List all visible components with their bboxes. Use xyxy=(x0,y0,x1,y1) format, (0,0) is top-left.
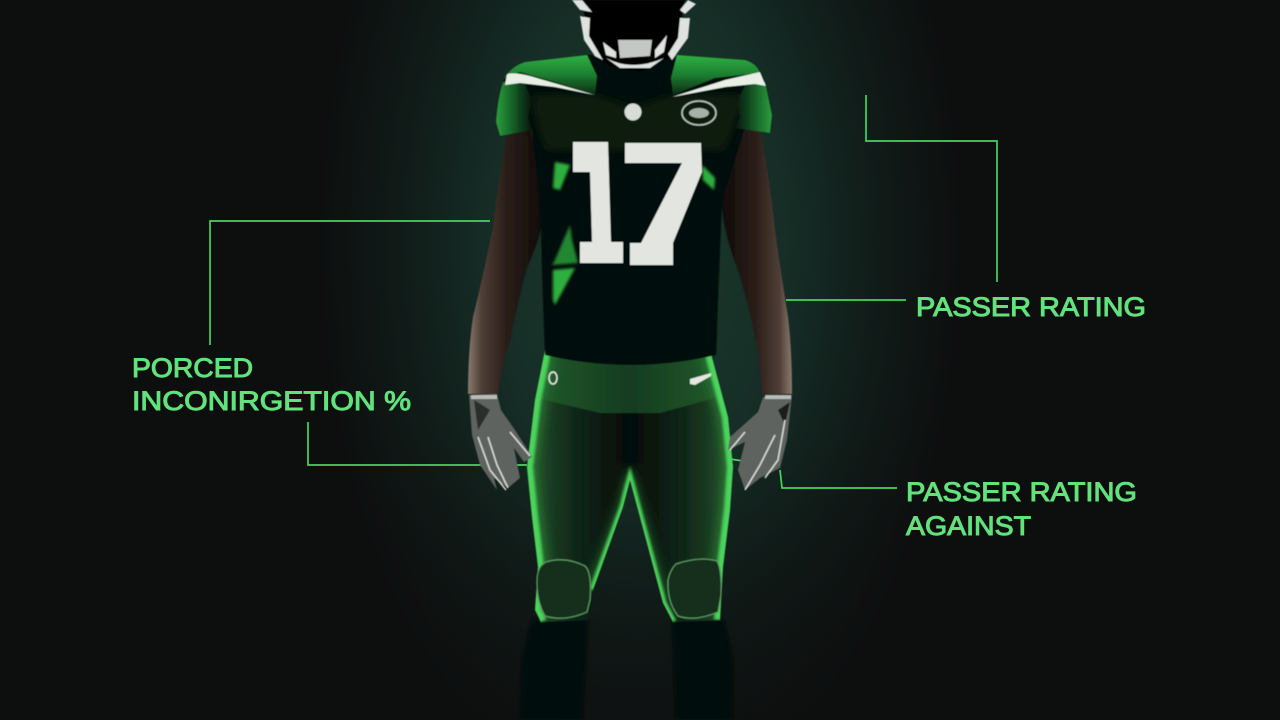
right glove xyxy=(728,395,792,490)
callout line: forced incompletion lower xyxy=(308,422,527,465)
callout line: forced incompletion upper xyxy=(210,221,490,345)
right arm xyxy=(721,128,792,394)
label: forced incompletion: PORCED xyxy=(132,353,253,383)
right shoulder panel xyxy=(671,55,760,95)
waist panel xyxy=(536,352,722,413)
helmet xyxy=(572,0,696,72)
label: passer rating against: PASSER RATING xyxy=(906,477,1137,507)
label: passer rating: PASSER RATING xyxy=(916,292,1146,322)
knee pads xyxy=(537,560,590,618)
left glove xyxy=(469,394,532,490)
player figure xyxy=(468,0,792,720)
jersey side glow xyxy=(552,162,715,305)
infographic canvas xyxy=(134,0,1144,720)
glowing leg edges xyxy=(527,350,733,622)
label: passer rating against: AGAINST xyxy=(906,511,1031,541)
socks xyxy=(521,620,733,720)
label: forced incompletion: INCONIRGETION % xyxy=(132,386,411,416)
left sleeve xyxy=(496,82,532,136)
label: passer rating against xyxy=(906,477,1137,541)
left shoulder panel xyxy=(504,55,597,95)
callout line: passer rating xyxy=(786,299,906,301)
shoulder stripes xyxy=(505,73,595,95)
pants xyxy=(527,350,733,622)
pants logos xyxy=(549,372,557,384)
chest sheen xyxy=(530,95,745,150)
number 17 xyxy=(573,142,702,265)
collar emblem xyxy=(624,104,642,120)
left arm xyxy=(468,128,543,394)
right sleeve xyxy=(735,82,772,133)
callout line: passer rating upper xyxy=(866,95,997,282)
face mask bars xyxy=(572,0,696,68)
jersey xyxy=(496,55,772,365)
jets crest xyxy=(682,101,716,125)
label: forced incompletion xyxy=(132,353,411,416)
callout line: passer rating against xyxy=(730,459,897,488)
